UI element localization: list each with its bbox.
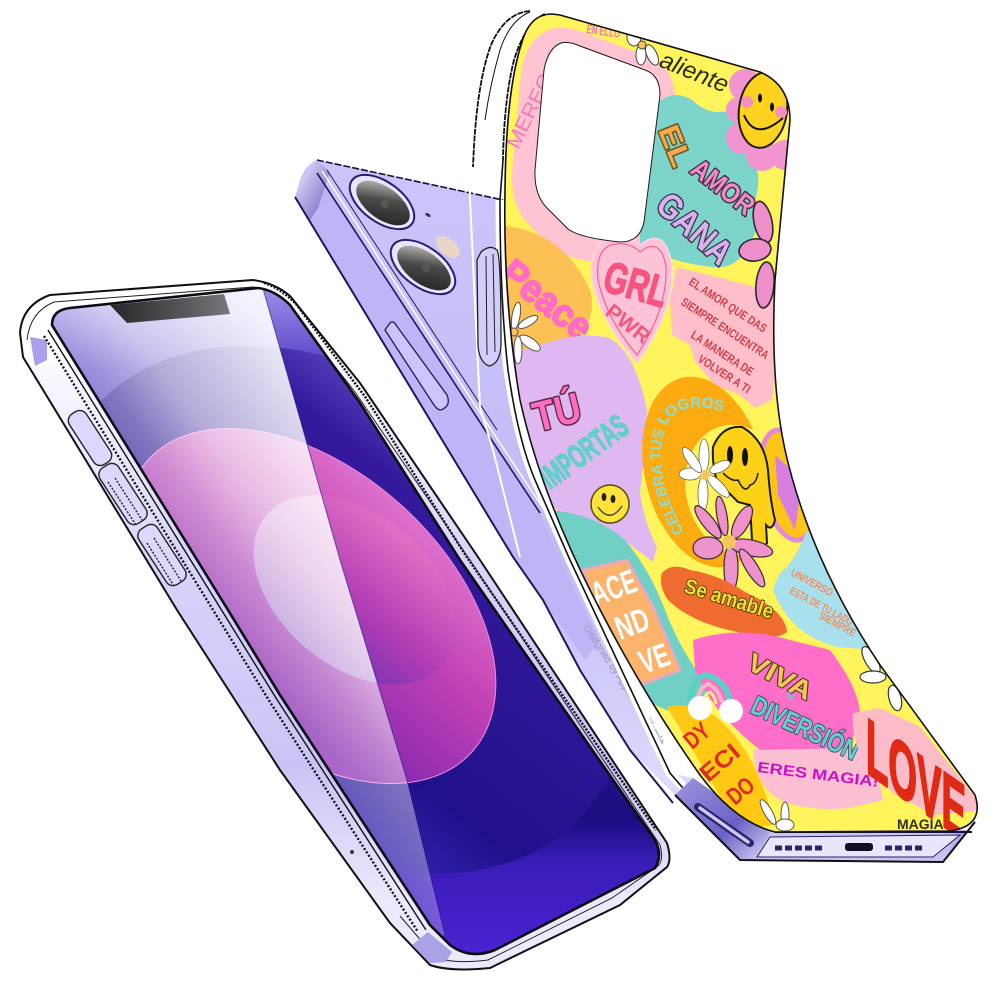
lilac blob: tu importas: TÚ (528, 383, 586, 441)
bottom handwriting: MAGIA (897, 816, 944, 832)
orange pill: se amable: Se amable (682, 575, 776, 624)
camera cutout on case (535, 42, 660, 242)
pale inner disc (254, 496, 452, 684)
yellow blob: hoy decido: DY (679, 717, 716, 755)
left phone: notch (110, 294, 230, 323)
white daisy bottom (758, 798, 794, 831)
glass reflection (40, 280, 445, 940)
pale disc highlight under glass (254, 496, 378, 683)
yellow blob: hoy decido: DO (722, 772, 760, 811)
speaker slot (698, 807, 750, 843)
pink paper note (670, 267, 785, 408)
lilac blob: tu importas: IMPORTAS (532, 407, 635, 496)
teal blob: peace and love: ND (610, 600, 654, 647)
bottom corner of left frame (412, 932, 452, 963)
light blue cloud: UNIVERSO (789, 567, 835, 599)
teal cloud: el amor gana: EL (652, 121, 697, 172)
ring text merece: MEREC (503, 71, 558, 152)
peach blob: peace (506, 226, 592, 350)
frame band (295, 173, 600, 660)
icon: case side button (477, 247, 501, 366)
orange arc: celebra tus logros (642, 376, 754, 568)
back cover artwork: EN ELLO (586, 21, 621, 41)
hot pink blob: vive la diversion: VIVA (742, 647, 818, 706)
icon: flash (432, 232, 464, 262)
heart: grl pwr (591, 238, 673, 363)
transparent case shell outline (470, 11, 700, 805)
melting smiley (713, 427, 775, 547)
pink blob: love (852, 708, 976, 830)
teal blob: peace and love (555, 510, 706, 712)
icon: small smiley (591, 485, 629, 523)
yellow blob: hoy decido: ECI (695, 739, 746, 788)
teal blob: peace and love: VE (634, 636, 675, 681)
icon: side button (385, 322, 448, 410)
light blue cloud: ESTA DE TU LADO (788, 585, 855, 629)
pink blob: eres magia: ERES MAGIA! (757, 759, 880, 791)
light blue cloud (773, 530, 868, 649)
pink flower right edge (738, 200, 776, 309)
teal cloud: el amor gana (640, 95, 761, 273)
heart: grl pwr: PWR (601, 300, 654, 349)
left phone: outer frame (20, 280, 670, 969)
hot pink blob: vive la diversion: DIVERSIÓN (746, 689, 864, 766)
back cover artwork (506, 14, 976, 832)
teal cloud: el amor gana: AMOR (685, 153, 761, 221)
handwritten caliente: aliente (656, 47, 733, 99)
light blue cloud: SIEMPRE (817, 610, 858, 639)
pink paper note: VOLVER A TI (695, 352, 753, 396)
pink paper note: LA MANERA DE (688, 328, 756, 379)
icon: camera lens lower (381, 229, 465, 305)
pink disc (142, 428, 496, 784)
peace sign disc at right edge (761, 428, 810, 542)
white daisy center (679, 439, 732, 511)
white daisy right (858, 644, 904, 712)
icon: camera lens upper (340, 164, 424, 240)
icon: volume and mute buttons (65, 407, 189, 589)
yellow blob: hoy decido (667, 705, 773, 830)
left phone: screen wallpaper (53, 290, 658, 953)
icon: rainbow with clouds (688, 675, 743, 723)
case artwork outline (505, 14, 977, 832)
outer disc (101, 346, 608, 874)
teal cloud: el amor gana: GANA (649, 185, 740, 273)
pink blob: eres magia (753, 747, 883, 809)
lilac blob: tu importas (514, 336, 657, 562)
hot pink blob: vive la diversion: la (785, 690, 797, 702)
peach blob: peace: Peace (492, 252, 600, 349)
orange pill: se amable (661, 567, 787, 637)
left phone: screen border (52, 288, 659, 954)
frame corner highlight (295, 160, 330, 220)
heart: grl pwr: GRL (598, 253, 673, 317)
bottom edge of middle phone with ports (675, 778, 975, 862)
hot pink blob: vive la diversion (693, 632, 864, 766)
pink camera ring (531, 46, 656, 246)
dotted inner edge lines (44, 336, 418, 932)
engraved text on frame: Designed by Apple in California (582, 624, 667, 747)
pink paper note: EL AMOR QUE DAS (686, 275, 769, 336)
teal blob: peace and love: ACE (586, 562, 642, 613)
white daisy left (510, 302, 543, 364)
pink flower center (691, 495, 774, 592)
icon: charging port (845, 843, 873, 851)
pink paper note: SIEMPRE ENCUENTRA (678, 295, 772, 362)
middle phone: lavender back (295, 160, 693, 803)
white daisy top (626, 34, 659, 66)
pink flower smiley (726, 69, 788, 171)
orange arc: celebra tus logros: CELEBRA TUS LOGROS (650, 396, 724, 534)
